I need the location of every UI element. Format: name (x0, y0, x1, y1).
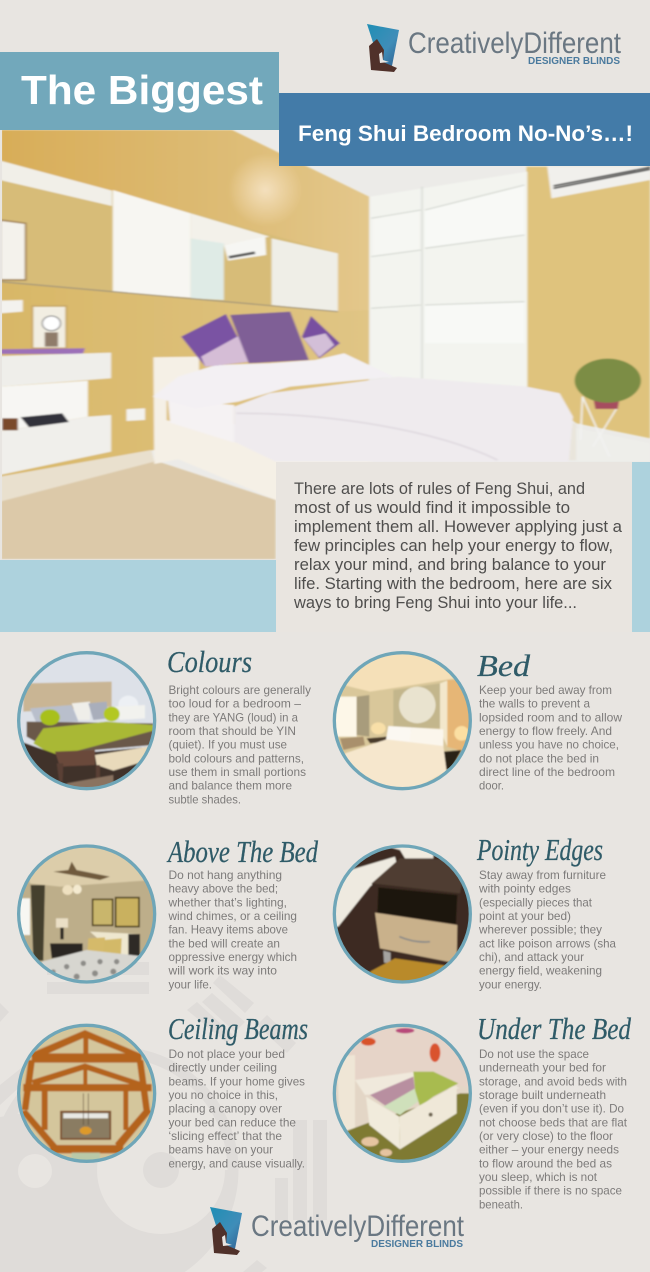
body text: Bright colours are generally (168, 684, 311, 697)
body text: bold colours and patterns, (168, 752, 304, 765)
body text: storage built underneath (479, 1089, 606, 1102)
body text: chi), and attack your (479, 951, 584, 964)
body text: energy, and cause visually. (168, 1157, 305, 1170)
body text: wherever possible; they (478, 924, 602, 937)
wall shelves (0, 353, 111, 475)
body text: underneath your bed for (479, 1062, 606, 1075)
body text: and balance them more (168, 780, 292, 793)
logo: top (367, 24, 622, 72)
body text: Do not place your bed (168, 1048, 285, 1061)
section: Bed (332, 648, 623, 793)
intro text panel: ways to bring Feng Shui into your life... (293, 594, 577, 612)
subtitle banner: Feng Shui Bedroom No-No’s…! (298, 121, 633, 146)
photo: hotel bed (332, 650, 472, 790)
bed (152, 352, 576, 498)
wall sockets (0, 300, 145, 421)
body text: your bed can reduce the (168, 1116, 296, 1129)
body text: fan. Heavy items above (168, 924, 288, 937)
wall mirror (0, 160, 338, 312)
body text: your energy. (479, 978, 542, 991)
body text: energy field, weakening (479, 965, 602, 978)
frame (19, 653, 155, 789)
heading: Above The Bed (166, 834, 318, 869)
body text: wind chimes, or a ceiling (167, 910, 297, 923)
body text: either – your energy needs (479, 1144, 619, 1157)
section: Above The Bed (17, 834, 318, 991)
body text: storage, and avoid beds with (479, 1075, 627, 1088)
frame (19, 846, 155, 982)
subtitle banner (279, 93, 650, 166)
photo: timber beams (17, 1023, 157, 1163)
intro text panel: relax your mind, and bring balance to your (294, 556, 607, 574)
body text (478, 869, 617, 991)
frame (334, 1025, 470, 1161)
photo: ceiling fan bedroom (17, 843, 157, 987)
left wall (2, 130, 370, 312)
window blind (370, 172, 527, 387)
body text: Keep your bed away from (479, 684, 612, 697)
photo: under-bed drawer (332, 1023, 472, 1163)
body text: do not place the bed in (479, 752, 599, 765)
body text: lopsided room and to allow (479, 711, 623, 724)
logo: bottom: DESIGNER BLINDS (371, 1239, 463, 1250)
body text: Do not hang anything (168, 869, 282, 882)
intro text panel (276, 462, 632, 632)
body text: the walls to prevent a (479, 698, 591, 711)
intro text panel: There are lots of rules of Feng Shui, and (294, 480, 585, 498)
body text: beams have on your (168, 1144, 273, 1157)
light blue strip right (632, 462, 650, 632)
heading: Pointy Edges (476, 832, 603, 867)
title banner: The Biggest: The Biggest (21, 67, 263, 113)
body text: beams. If your home gives (168, 1075, 305, 1088)
body text: you no choice in this, (168, 1089, 278, 1102)
body text: too loud for a bedroom – (168, 698, 302, 711)
logo: bottom (210, 1207, 465, 1255)
heading: Ceiling Beams (168, 1011, 308, 1046)
frame (334, 846, 470, 982)
body text: (especially pieces that (479, 896, 593, 909)
body text: not choose beds that are flat (479, 1116, 628, 1129)
body text: use them in small portions (168, 766, 306, 779)
body text: (even if you don’t use it). Do (479, 1103, 624, 1116)
light blue block left (0, 560, 276, 632)
body text: energy to flow freely. And (479, 725, 612, 738)
air conditioner (547, 167, 650, 198)
body text: to flow around the bed as (479, 1157, 612, 1170)
section: Colours (17, 644, 311, 806)
section: Under The Bed (332, 1011, 631, 1211)
body text: Do not use the space (479, 1048, 589, 1061)
body text: unless you have no choice, (479, 739, 619, 752)
background pattern: yin yang and trigram bars (0, 962, 327, 1272)
body text: Stay away from furniture (479, 869, 606, 882)
body text (168, 684, 311, 806)
body text (479, 684, 623, 793)
heading: Bed (477, 648, 531, 683)
intro text panel: most of us would find it impossible to (294, 499, 570, 517)
body text: point at your bed) (479, 910, 571, 923)
body text: (quiet). If you must use (168, 739, 287, 752)
body text: placing a canopy over (168, 1103, 282, 1116)
section: Ceiling Beams (17, 1011, 308, 1170)
body text (167, 869, 297, 991)
right wall (527, 167, 650, 438)
hero photo: bedroom (0, 130, 650, 559)
photo: bedside table (332, 843, 472, 987)
body text: will work its way into (167, 965, 277, 978)
body text: room that should be YIN (168, 725, 296, 738)
intro text panel: implement them all. However applying just a (294, 518, 622, 536)
body text: you sleep, which is not (479, 1171, 598, 1184)
body text: heavy above the bed; (168, 883, 278, 896)
body text: direct line of the bedroom (479, 766, 615, 779)
photo: colourful bed (17, 650, 157, 793)
body text: act like poison arrows (sha (479, 937, 617, 950)
body text: beneath. (479, 1198, 523, 1211)
intro text panel: few principles can help your energy to flow, (294, 537, 613, 555)
body text: possible if there is no space (479, 1185, 622, 1198)
heading: Colours (167, 644, 252, 679)
body text: with pointy edges (478, 883, 571, 896)
body text: whether that’s lighting, (167, 896, 287, 909)
body text: door. (479, 780, 504, 793)
body text: (or very close) to the floor (479, 1130, 613, 1143)
logo: bottom: CreativelyDifferent (251, 1210, 465, 1243)
desk clock (0, 306, 85, 354)
purple pillows (181, 312, 340, 367)
frame (19, 1025, 155, 1161)
frame (334, 653, 470, 789)
logo: top: DESIGNER BLINDS (528, 56, 620, 67)
floor (0, 460, 276, 559)
body text: oppressive energy which (168, 951, 297, 964)
logo: top: CreativelyDifferent (408, 27, 622, 60)
intro text panel: life. Starting with the bedroom, here are six (294, 575, 612, 593)
body text: subtle shades. (168, 793, 241, 806)
section: Pointy Edges (332, 832, 617, 991)
potted plant (574, 358, 642, 430)
body text: the bed will create an (168, 937, 280, 950)
body text (168, 1048, 305, 1170)
title banner: The Biggest (0, 52, 279, 130)
body text: your life. (168, 978, 212, 991)
body text: they are YANG (loud) in a (168, 711, 299, 724)
body text (479, 1048, 628, 1211)
body text: ‘slicing effect’ that the (168, 1130, 282, 1143)
body text: directly under ceiling (168, 1062, 277, 1075)
